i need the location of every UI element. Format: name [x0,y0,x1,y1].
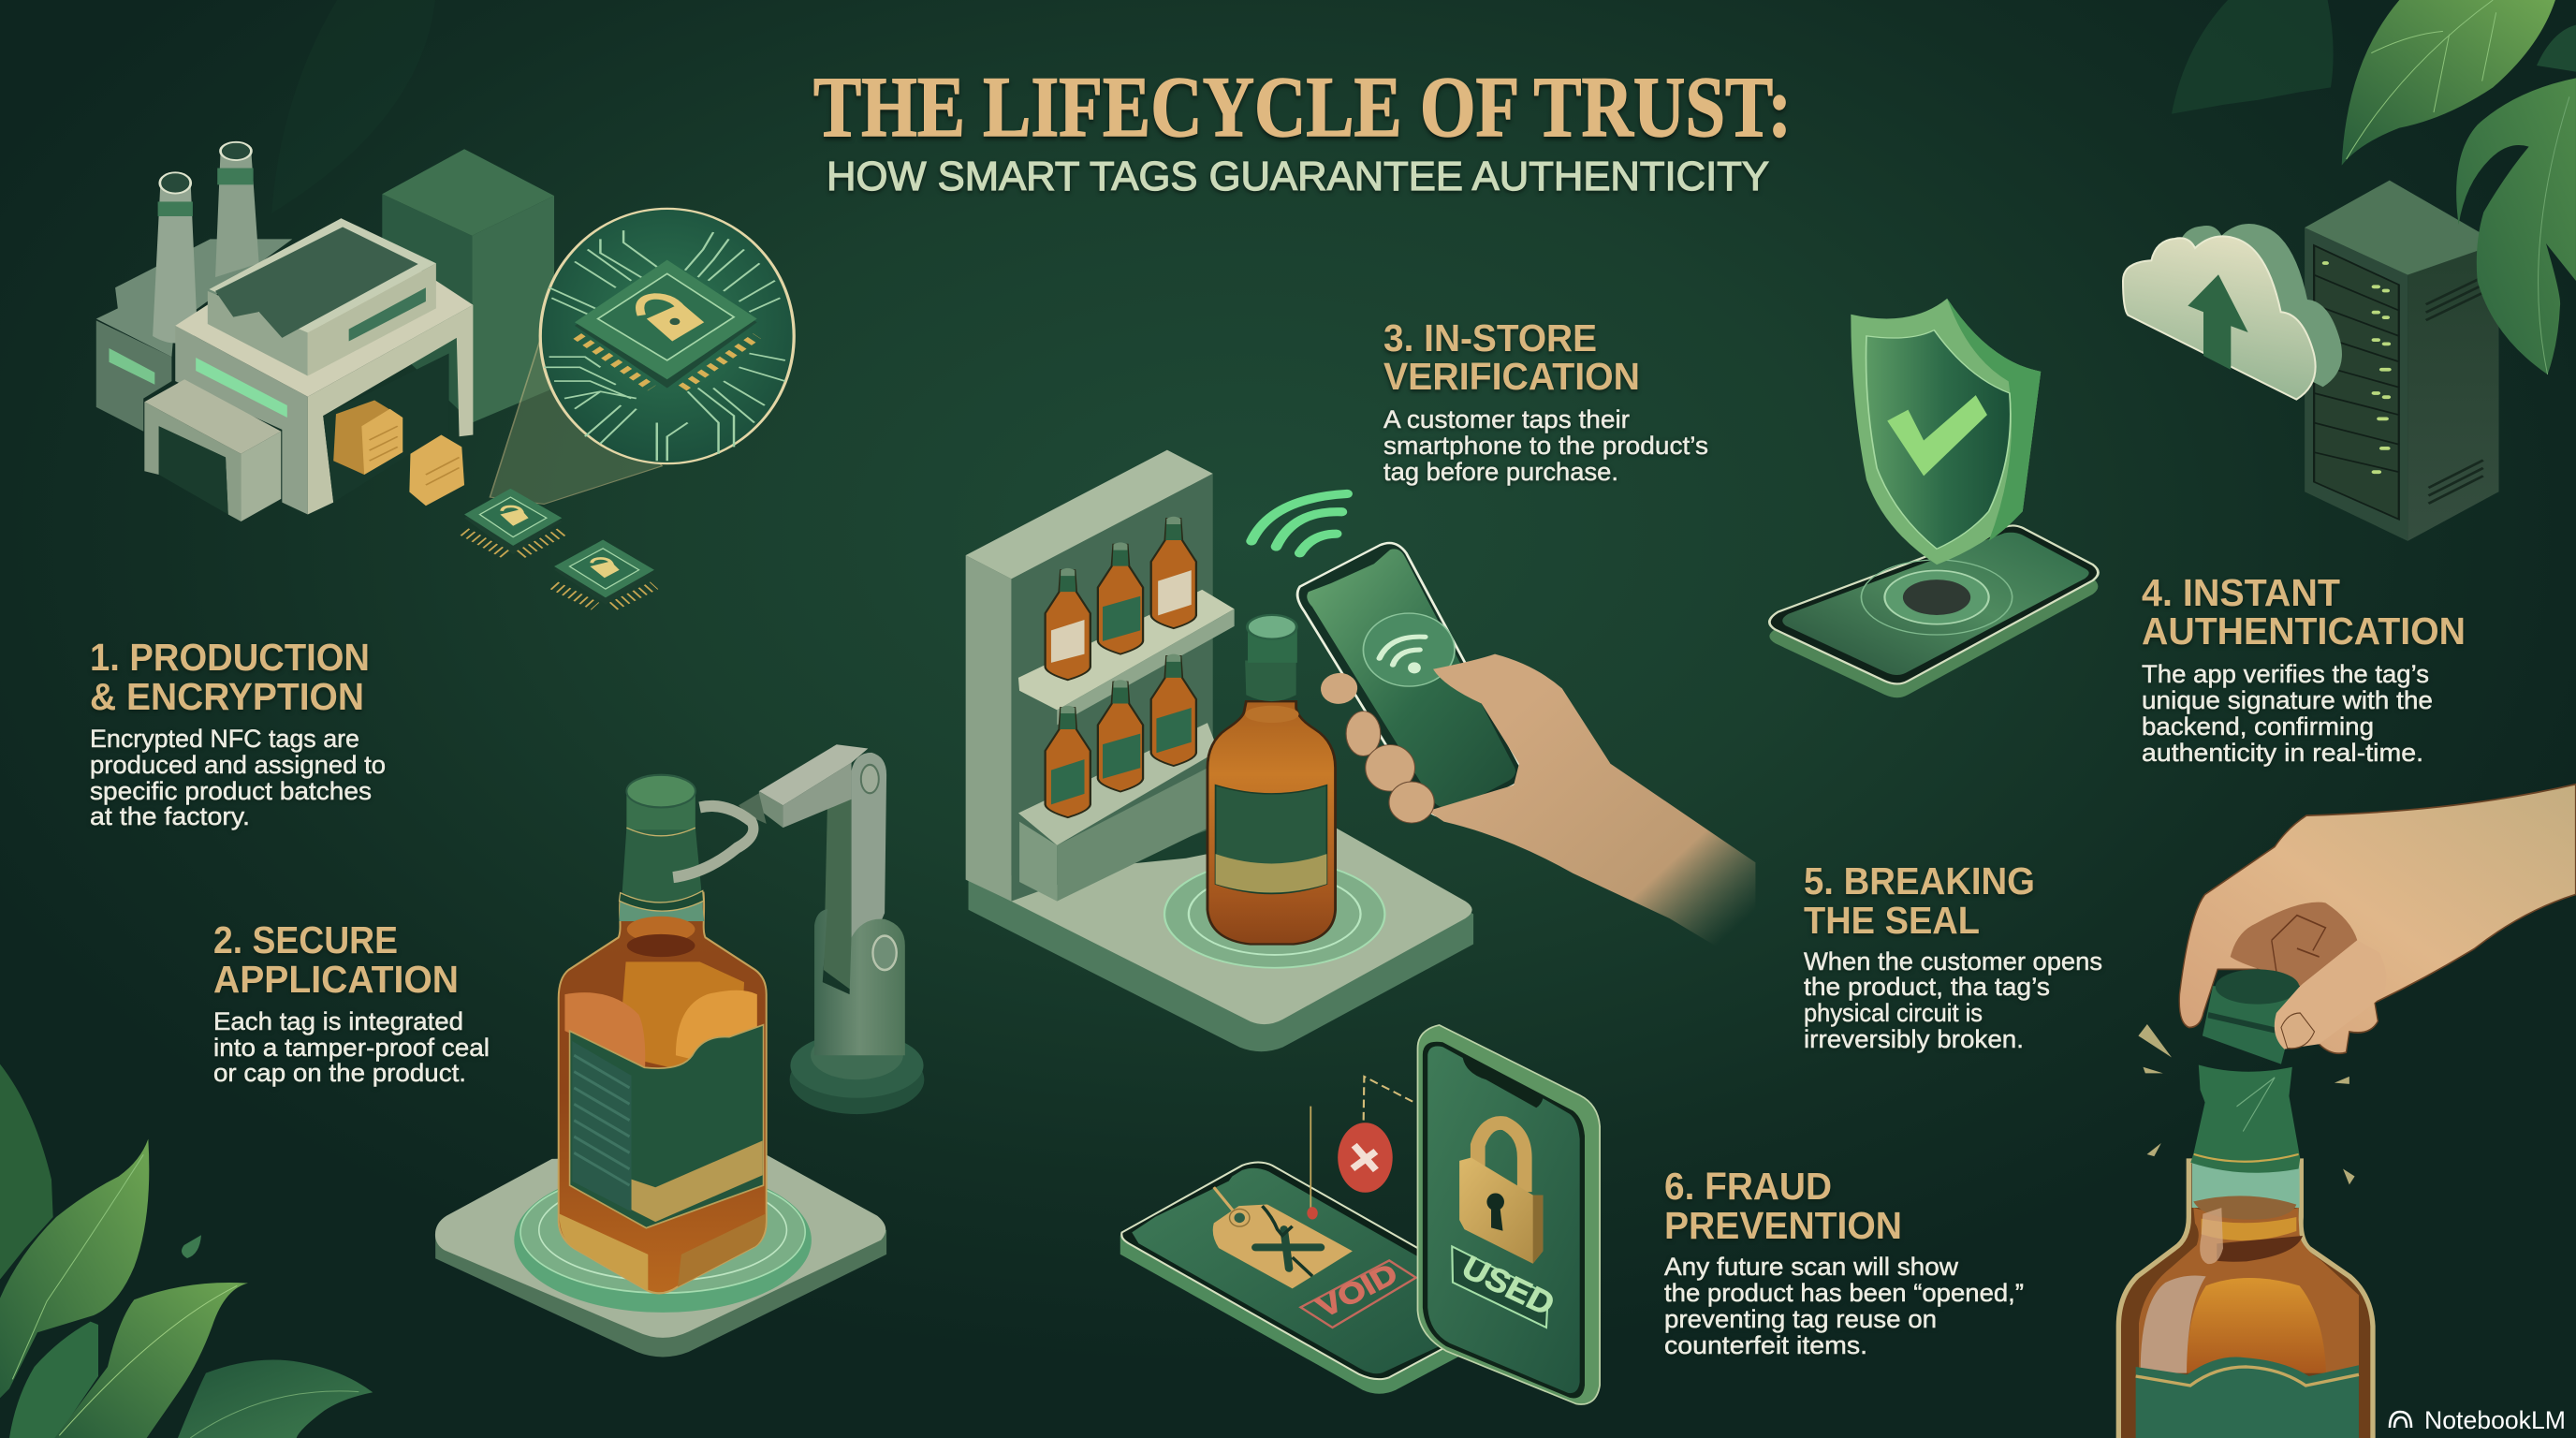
bottle [1208,615,1336,945]
title: THE LIFECYCLE OF TRUST: [813,59,1792,154]
shield [1851,299,2041,565]
bottle label [570,1025,764,1228]
NFC wave arcs [1251,493,1347,553]
flat phone [1120,1163,1470,1394]
roof module [208,218,436,376]
robot gripper [673,806,754,877]
shelf unit [966,450,1235,902]
heading [2142,571,2466,653]
store base [969,829,1473,1051]
body: physical circuit is [1804,999,1983,1027]
magnified chip lens [540,209,794,463]
body: tag before purchase. [1383,458,1618,486]
body: When the customer opens [1804,947,2102,976]
heading: THE SEAL [1804,899,1980,942]
body: smartphone to the product’s [1383,432,1708,460]
used stamp: USED [1456,1248,1561,1323]
heading [213,918,459,1001]
heading: AUTHENTICATION [2142,609,2466,653]
body [1664,1253,2024,1359]
illustration: secure application bottle [435,744,924,1357]
porch [144,379,281,521]
body: produced and assigned to [90,751,386,779]
heading: 1. PRODUCTION [90,636,370,679]
body: Encrypted NFC tags are [90,725,359,753]
step 2 text [213,918,490,1087]
body: or cap on the product. [213,1059,466,1087]
logo wordmark: NotebookLM [2424,1406,2566,1434]
body: Each tag is integrated [213,1007,463,1035]
thumb [2275,940,2386,1049]
title block [813,59,1792,199]
shelved bottles [1046,517,1196,817]
heading [1664,1165,1902,1247]
body: into a tamper-proof ceal [213,1034,490,1062]
body: preventing tag reuse on [1664,1305,1937,1333]
heading: & ENCRYPTION [90,675,364,718]
heading: 5. BREAKING [1804,859,2035,902]
smokestacks [153,142,259,343]
step 4 text [2142,571,2466,767]
illustration: server rack [2305,181,2499,541]
small chip 1 [464,489,562,554]
neck seal [2190,1064,2300,1173]
voided tag [1213,1187,1353,1288]
subtitle: HOW SMART TAGS GUARANTEE AUTHENTICITY [827,154,1769,199]
faint leaf: top left [271,0,435,213]
body: the product has been “opened,” [1664,1279,2024,1307]
glass neck [2192,1161,2300,1208]
heading: PREVENTION [1664,1204,1902,1247]
illustration: fraud prevention phones [1120,1025,1600,1404]
heading: 4. INSTANT [2142,571,2340,614]
heading [1804,859,2035,942]
palm and fingers [2179,785,2576,1053]
body [1804,947,2102,1053]
robot arm [739,744,924,1114]
small chip 2 [554,540,654,607]
step 5 text [1804,859,2102,1053]
NotebookLM watermark [2390,1406,2566,1434]
body: at the factory. [90,802,250,830]
upload arrow [2188,274,2248,370]
body [2142,660,2433,767]
bottle cap [619,775,704,911]
illustration: factory and NFC chips [96,142,794,607]
magnifier cone [490,336,662,504]
body [213,1007,490,1087]
body: The app verifies the tag’s [2142,660,2429,688]
step 1 text [90,636,386,830]
body: backend, confirming [2142,712,2374,741]
decorative leaves: bottom left [0,1064,373,1438]
body: unique signature with the [2142,686,2433,714]
body [1383,405,1708,486]
needle [1307,1107,1318,1219]
illustration: opened bottle body [2118,1161,2373,1438]
bottle body [559,893,767,1293]
amber liquid [2139,1208,2359,1373]
flat phone [1769,525,2098,697]
main building [175,218,473,515]
body: counterfeit items. [1664,1331,1867,1359]
heading [1383,316,1640,398]
left wing [96,239,292,432]
platform [435,1155,886,1357]
illustration: shield and phone [1769,299,2098,697]
dashed connector [1364,1077,1412,1121]
illustration: hand breaking seal [2138,785,2576,1184]
seal fragments [2138,1024,2355,1184]
heading: APPLICATION [213,958,459,1001]
upright phone [1418,1025,1600,1404]
void stamp: VOID [1311,1257,1403,1324]
check mark [1887,395,1987,476]
back tower [382,149,554,422]
heading: VERIFICATION [1383,355,1640,398]
hand and arm [1316,654,1755,970]
illustration: cloud upload [2123,224,2342,400]
body: Any future scan will show [1664,1253,1959,1281]
body: the product, tha tag’s [1804,973,2050,1001]
heading: 6. FRAUD [1664,1165,1832,1208]
decorative leaves: top right [2172,0,2576,374]
body: irreversibly broken. [1804,1025,2024,1053]
body: A customer taps their [1383,405,1630,433]
heading [90,636,370,718]
step 6 text [1664,1165,2024,1359]
logo icon [2390,1412,2411,1428]
document folders [333,400,464,506]
step 3 text [1383,316,1708,486]
error badge [1338,1123,1393,1193]
bottle label [2136,1357,2359,1438]
body: specific product batches [90,777,372,805]
padlock [1459,1123,1543,1264]
torn cap [2203,969,2300,1064]
heading: 3. IN-STORE [1383,316,1597,360]
body: authenticity in real-time. [2142,739,2423,767]
illustration: in-store verification [966,450,1755,1051]
smartphone [1297,543,1522,817]
heading: 2. SECURE [213,918,398,961]
body [90,725,386,830]
